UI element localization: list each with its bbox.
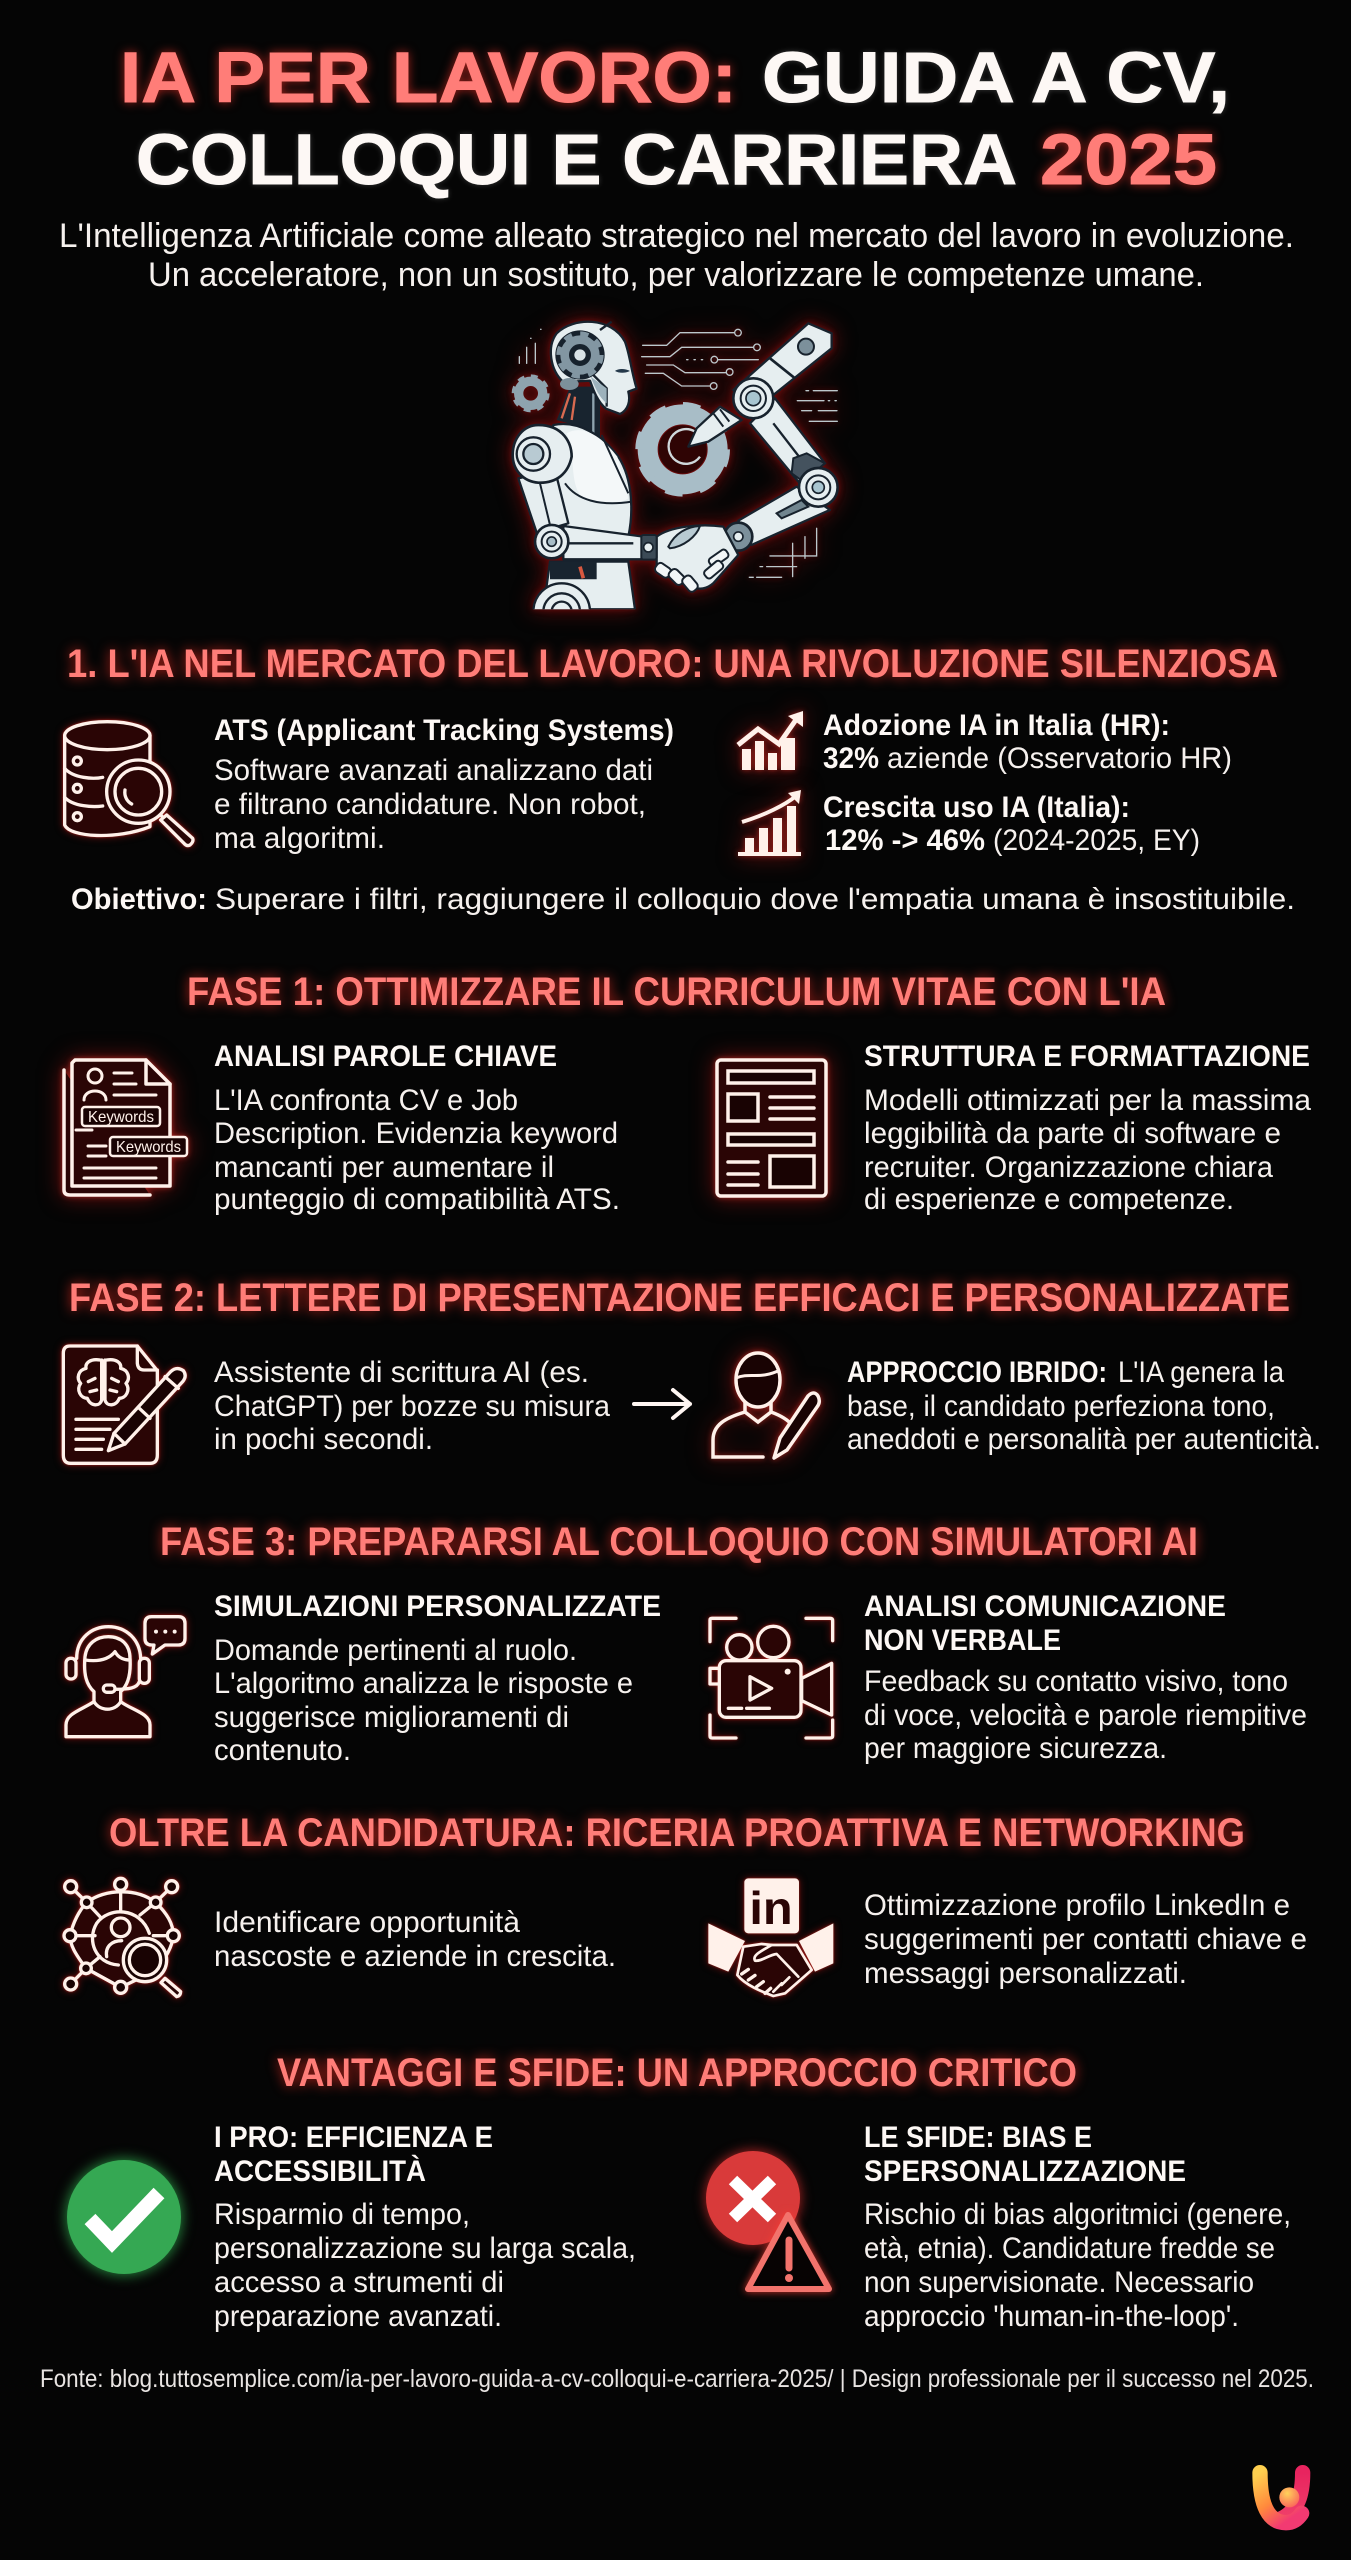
text: pros — [214, 2121, 636, 2333]
text: adoption stat: aziende (Osservatorio HR) — [887, 742, 1232, 775]
text: personalised simulations: SIMULAZIONI PERSONALIZZATE — [214, 1590, 661, 1623]
text: nonverbal analysis: Feedback su contatto visivo, tono — [864, 1665, 1288, 1698]
gear icon small — [514, 377, 547, 410]
text: growth stat: 12% -> 46% — [825, 824, 985, 857]
text: keyword analysis: L'IA confronta CV e Job — [214, 1084, 518, 1117]
icon: chart growth — [738, 790, 801, 856]
shoulder — [513, 425, 572, 483]
arrow — [634, 1390, 690, 1418]
text: challenges: SPERSONALIZZAZIONE — [864, 2155, 1186, 2188]
text: personalised simulations — [214, 1590, 661, 1767]
text: challenges — [864, 2121, 1291, 2333]
left elbow joint — [535, 525, 568, 558]
text: keyword analysis: mancanti per aumentare il — [214, 1151, 554, 1184]
text: personalised simulations: Domande pertinenti al ruolo. — [214, 1634, 577, 1667]
text: hidden opportunities — [214, 1906, 616, 1973]
heading: pros and challenges: VANTAGGI E SFIDE: UN APPROCCIO CRITICO — [277, 2051, 1077, 2095]
heading: beyond the application: OLTRE LA CANDIDATURA: RICERIA PROATTIVA E NETWORKING — [109, 1811, 1245, 1855]
icon: LinkedIn handshake — [708, 1878, 833, 1996]
text: adoption stat: Adozione IA in Italia (HR): — [823, 709, 1170, 742]
text: keyword analysis: punteggio di compatibilità ATS. — [214, 1183, 620, 1216]
heading: fase 1: FASE 1: OTTIMIZZARE IL CURRICULUM VITAE CON L'IA — [187, 970, 1166, 1014]
text: LinkedIn optimisation — [864, 1889, 1307, 1990]
right arm upper — [733, 323, 832, 395]
icon: video camera — [710, 1618, 833, 1738]
text: structure: STRUTTURA E FORMATTAZIONE — [864, 1040, 1310, 1073]
text: nonverbal analysis: di voce, velocità e parole riempitive — [864, 1699, 1307, 1732]
icon: database with magnifier — [65, 722, 193, 846]
text: hidden opportunities: nascoste e aziende in crescita. — [214, 1940, 616, 1973]
upper arm — [518, 470, 568, 533]
icon: green check — [67, 2160, 181, 2274]
text: ATS: e filtrano candidature. Non robot, — [214, 788, 646, 821]
text: growth stat: Crescita uso IA (Italia): — [823, 791, 1130, 824]
text: hybrid approach: L'IA genera la — [1118, 1356, 1284, 1389]
text: personalised simulations: suggerisce miglioramenti di — [214, 1701, 569, 1734]
text: AI writing assistant: in pochi secondi. — [214, 1423, 433, 1456]
subtitle: L'Intelligenza Artificiale come alleato strategico nel mercato del lavoro in evoluzione. — [59, 217, 1294, 255]
text: structure: Modelli ottimizzati per la massima — [864, 1084, 1311, 1117]
text: AI writing assistant: ChatGPT) per bozze su misura — [214, 1390, 610, 1423]
title: GUIDA A CV, — [762, 39, 1230, 118]
heading: fase 3: FASE 3: PREPARARSI AL COLLOQUIO CON SIMULATORI AI — [160, 1520, 1198, 1564]
icon: network search — [64, 1878, 181, 1997]
subtitle: Un acceleratore, non un sostituto, per valorizzare le competenze umane. — [148, 256, 1204, 294]
torso — [547, 424, 631, 537]
text: pros: accesso a strumenti di — [214, 2266, 504, 2299]
text: ATS — [214, 714, 674, 855]
text: nonverbal analysis — [864, 1590, 1307, 1765]
text: nonverbal analysis: NON VERBALE — [864, 1624, 1061, 1657]
forearm — [563, 526, 643, 559]
text: structure: recruiter. Organizzazione chiara — [864, 1151, 1273, 1184]
text: keyword analysis: Description. Evidenzia keyword — [214, 1117, 618, 1150]
icon: CV document with keywords — [64, 1060, 187, 1195]
logo — [1260, 2473, 1303, 2523]
text: pros: preparazione avanzati. — [214, 2300, 502, 2333]
text: adoption stat — [823, 709, 1232, 775]
text: hybrid approach: APPROCCIO IBRIDO: — [847, 1356, 1107, 1389]
text: structure — [864, 1040, 1311, 1216]
large gear — [639, 406, 726, 493]
elbow joints — [733, 378, 773, 418]
circuit lines — [519, 329, 837, 577]
text: growth stat — [823, 791, 1200, 857]
icon: CV document with keywords: Keywords — [88, 1109, 154, 1126]
text: personalised simulations: L'algoritmo analizza le risposte e — [214, 1667, 633, 1700]
wrist — [641, 535, 657, 560]
text: ATS: ma algoritmi. — [214, 822, 385, 855]
text: AI writing assistant: Assistente di scrittura AI (es. — [214, 1356, 589, 1389]
text: nonverbal analysis: per maggiore sicurezza. — [864, 1732, 1167, 1765]
text: hybrid approach — [847, 1356, 1321, 1456]
text: keyword analysis: ANALISI PAROLE CHIAVE — [214, 1040, 557, 1073]
text: nonverbal analysis: ANALISI COMUNICAZIONE — [864, 1590, 1226, 1623]
text: ATS: ATS (Applicant Tracking Systems) — [214, 714, 674, 747]
text: personalised simulations: contenuto. — [214, 1734, 351, 1767]
illustration: robot handshake with gears — [513, 322, 838, 640]
icon: CV document with keywords: Keywords — [116, 1139, 181, 1156]
text: objective: Obiettivo: — [71, 883, 207, 916]
text: hybrid approach: aneddoti e personalità per autenticità. — [847, 1423, 1321, 1456]
title: 2025 — [1040, 121, 1217, 200]
subtitle — [59, 217, 1294, 294]
head gear — [555, 330, 605, 390]
text: objective: Superare i filtri, raggiungere il colloquio dove l'empatia umana è insostituibile. — [215, 883, 1295, 916]
text: pros: Risparmio di tempo, — [214, 2198, 470, 2231]
text: AI writing assistant — [214, 1356, 610, 1456]
arm tool — [688, 407, 742, 447]
title: IA PER LAVORO: — [120, 39, 737, 118]
text: adoption stat: 32% — [823, 742, 879, 775]
text: challenges: LE SFIDE: BIAS E — [864, 2121, 1092, 2154]
text: pros: personalizzazione su larga scala, — [214, 2232, 636, 2265]
icon: document with brain and pen — [63, 1346, 185, 1463]
icon: red cross and warning — [706, 2151, 829, 2289]
text: challenges: età, etnia). Candidature fredde se — [864, 2232, 1275, 2265]
head — [551, 322, 637, 414]
neck — [557, 387, 600, 438]
text: challenges: non supervisionate. Necessario — [864, 2266, 1254, 2299]
text: LinkedIn optimisation: suggerimenti per contatti chiave e — [864, 1923, 1307, 1956]
text: growth stat: (2024-2025, EY) — [993, 824, 1200, 857]
text: structure: di esperienze e competenze. — [864, 1183, 1234, 1216]
arm mid — [750, 398, 825, 482]
text: LinkedIn optimisation: Ottimizzazione profilo LinkedIn e — [864, 1889, 1290, 1922]
text: keyword analysis — [214, 1040, 620, 1216]
text: pros: ACCESSIBILITÀ — [214, 2154, 426, 2188]
lower body — [543, 562, 635, 609]
text: hybrid approach: base, il candidato perfeziona tono, — [847, 1390, 1275, 1423]
text: LinkedIn optimisation: messaggi personalizzati. — [864, 1957, 1187, 1990]
text: challenges: approccio 'human-in-the-loop'. — [864, 2300, 1239, 2333]
icon: chart adoption — [738, 711, 803, 770]
arm lower — [738, 487, 830, 545]
icon: headset operator — [66, 1617, 185, 1737]
text: challenges: Rischio di bias algoritmici (genere, — [864, 2198, 1291, 2231]
icon: person with pencil — [713, 1353, 819, 1458]
title: COLLOQUI E CARRIERA — [136, 121, 1017, 200]
icon: layout document — [717, 1060, 826, 1196]
text: ATS: Software avanzati analizzano dati — [214, 754, 653, 787]
text: hidden opportunities: Identificare opportunità — [214, 1906, 520, 1939]
icon: LinkedIn handshake: in — [749, 1882, 793, 1934]
text: structure: leggibilità da parte di software e — [864, 1117, 1281, 1150]
title — [120, 39, 1230, 200]
hand — [657, 525, 738, 589]
text: pros: I PRO: EFFICIENZA E — [214, 2121, 493, 2154]
